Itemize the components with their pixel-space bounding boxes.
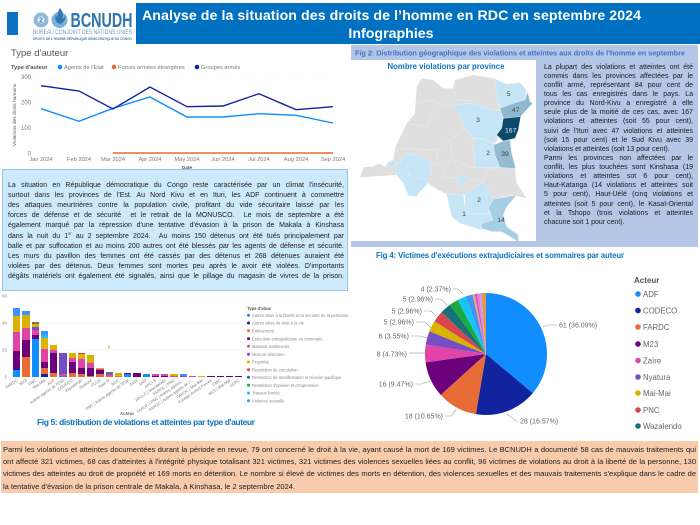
- x axis labels: Raia M: [97, 378, 111, 389]
- x axis: Mar 2024: [101, 157, 125, 163]
- text block: provinces: suivi de l'Ituri avec 47 violations et atteintes: [544, 128, 693, 135]
- province: Nord-Kivu: [497, 117, 521, 141]
- bar legend: Type d'abus: [247, 306, 272, 311]
- bar legend: Restriction de manifestation et réunion pacifique: [252, 375, 342, 380]
- x axis labels: FDLR: [90, 378, 102, 388]
- pie legend: Wazalendo: [643, 422, 682, 431]
- map heading: Nombre violations par province: [388, 62, 505, 71]
- x axis labels: M23: [18, 377, 28, 386]
- map values: 5: [507, 91, 511, 98]
- x axis labels: CMC: [211, 378, 222, 387]
- bar legend: Mort en détention: [252, 352, 285, 357]
- x axis labels: FARDC: [5, 378, 19, 390]
- text panel: summary of violations: victimes des atteintes au droit de propriété et 169 morts en détention. Le nombre si élevé de victimes des morts en détention, des violences sexuelles et des mauvais traitements s'explique dans le cadre de: [3, 469, 696, 478]
- bar legend: Autres abus à la liberté et la sécurité de la personne: [252, 313, 349, 318]
- x axis: [29, 157, 345, 171]
- stacked bars: [13, 308, 242, 377]
- fig 5 caption: Fig 5: distribution de violations et atteintes par type d'auteur: [37, 417, 256, 427]
- x axis labels: ANR: [138, 378, 148, 387]
- x axis labels: FARDC | Autres agents de l'...: [148, 378, 194, 412]
- x axis labels: UDPC: [228, 378, 241, 388]
- line chart: type d'auteur: [11, 48, 345, 171]
- text block: provinces: conflit armé, représentant 84 pour cent de: [544, 82, 693, 89]
- chart legend: Groupes armés: [201, 65, 240, 71]
- x axis: Jun 2024: [211, 157, 235, 163]
- pie data labels: 61 (36.09%): [559, 322, 597, 330]
- bar legend: Autres abus du droit à la vie: [252, 321, 305, 326]
- map values: [462, 91, 520, 224]
- province: Kwilu and Kwango: [396, 153, 431, 197]
- series: agents de l'Etat: [41, 97, 333, 123]
- text panel: situation: surtout dans les provinces de l'Est. Au Nord Kivu et en Ituri, les ADF continuent à commettre: [8, 192, 344, 199]
- y axis labels: 0: [4, 374, 7, 380]
- province: Kongo Central: [386, 160, 397, 167]
- x axis labels: APCLS: [143, 378, 157, 389]
- x axis labels: Acteur: [120, 411, 134, 416]
- title: Analyse de la situation des droits de l’homme en RDC en septembre 2024: [142, 8, 641, 24]
- map values: 2: [486, 150, 490, 157]
- map footer: [351, 241, 536, 247]
- text block: provinces: violations et atteintes sot 6 pour cent),: [544, 173, 693, 180]
- text block: provinces: La plupart des violations et atteintes ont été: [544, 64, 693, 71]
- x axis: Date: [182, 165, 193, 171]
- province: Sud-Kivu: [493, 140, 516, 168]
- x axis: Aug 2024: [284, 157, 308, 163]
- text panel: situation: [2, 169, 348, 291]
- map values: 1: [462, 211, 466, 218]
- text block: provinces: chacune soit 1 pour cent).: [544, 219, 625, 226]
- province: Haut-Katanga: [482, 195, 518, 242]
- text panel: situation: des attaques meurtrières contre la population civile, profitant du vide sécuritaire laissé par les: [8, 202, 344, 209]
- map values: 167: [505, 128, 517, 134]
- chart legend: Agents de l'Etat: [64, 65, 104, 71]
- x axis: Jan 2024: [29, 157, 53, 163]
- x axis labels: M23 | Mai-Mai: [208, 378, 231, 396]
- text panel: situation: forces de défense et de sécurité et le retrait de la MONUSCO. Le mois de septembre a été: [8, 212, 344, 219]
- y axis labels: [2, 294, 7, 380]
- chart legend: Type d'auteur: [11, 65, 48, 71]
- pie data labels: 8 (4.73%): [377, 352, 407, 358]
- fig 4 caption: Fig 4: Victimes d'exécutions extrajudiciaires et sommaires par auteur: [376, 251, 624, 260]
- text block: provinces: Haut-Katanga (14 violations et atteintes soit: [544, 182, 693, 189]
- x axis labels: Zaïre: [128, 377, 139, 387]
- x axis labels: [5, 377, 241, 416]
- y axis labels: 40: [2, 320, 7, 326]
- province: Haut-Uélé: [494, 78, 527, 108]
- province: Lualaba: [447, 194, 493, 230]
- header accent block: [7, 12, 18, 35]
- panel: fig 2 geographic distribution: [351, 45, 698, 247]
- text panel: summary of violations: ont affecté 321 victimes, 68 cas d'atteintes à l'intégrité physique totalisant 321 victimes, 321 victimes des violences sexuelles liées au conflit, 96 victimes de violations au droit à la liberté de la personne, 130: [3, 457, 696, 466]
- text block: provinces: Parmi les provinces non affectées par le: [544, 155, 693, 162]
- x axis labels: APCLS | Wazalendo: [134, 377, 167, 403]
- pie data labels: 5 (2.96%): [384, 320, 414, 326]
- pie data labels: 16 (9.47%): [379, 382, 413, 388]
- y axis: 200: [21, 100, 32, 106]
- text block: provinces: violations et atteintes (soit 13 pour cent).: [544, 146, 670, 153]
- text block: provinces: et la Tshopo (trois violations et atteintes: [544, 210, 693, 217]
- pie legend: M23: [643, 340, 658, 349]
- pie data labels: [377, 286, 597, 426]
- logo tagline: DROITS DE L'HOMME RÉPUBLIQUE DÉMOCRATIQUE DU CONGO: [33, 36, 132, 41]
- text block: provinces: tous les cas enregistrés dans le pays. La: [544, 91, 693, 98]
- y axis: Violations des droits humains: [12, 83, 18, 146]
- province: Haut-Lomami: [465, 182, 493, 214]
- pie data labels: 18 (10.65%): [405, 414, 443, 420]
- province: Maniema: [473, 138, 500, 167]
- bar legend: Travaux forcés: [252, 391, 280, 396]
- text block: provinces: [544, 64, 693, 226]
- x axis: Jul 2024: [248, 157, 270, 163]
- y axis: 0: [28, 152, 32, 158]
- icon: human rights flame: [52, 8, 68, 28]
- text block: provinces: province du Nord-Kivu a enregistré à elle: [544, 100, 693, 107]
- country base: [360, 75, 527, 207]
- bar legend: Restriction d'opinion et d'expression: [252, 383, 319, 388]
- bar legend: Exécution extrajudiciaire ou sommaire: [252, 336, 323, 341]
- y axis labels: 20: [2, 348, 7, 352]
- pie data labels: 28 (16.57%): [520, 418, 558, 426]
- text panel: situation: dans la nuit du 1er au 2 septembre 2024. Au moins 150 détenus ont été tués principalement par: [8, 230, 344, 240]
- x axis labels: Mai-Mai: [32, 378, 46, 390]
- title banner: [136, 3, 700, 44]
- text panel: situation: balle et par suffocation et au moins 200 autres ont été blessés par les agents de défense et sécurité.: [8, 243, 344, 250]
- x axis labels: FARDC | PNC | Autres agents...: [136, 378, 185, 414]
- chart legend: Forces armées étrangères: [118, 65, 185, 71]
- pie chart: victims by actor: [376, 276, 682, 431]
- series: groupes armés: [41, 86, 333, 110]
- pie legend: ADF: [643, 290, 659, 299]
- fig 2 caption: Fig 2: Distribution géographique des violations et atteintes aux droits de l'homme en septembre: [355, 48, 685, 58]
- map values: 2: [477, 197, 481, 204]
- bar legend: Restriction de circulation: [252, 367, 298, 372]
- bar legend: Violence sexuelle: [252, 398, 285, 403]
- pie data labels: 6 (3.55%): [379, 334, 409, 340]
- y axis labels: 60: [2, 294, 7, 298]
- text panel: summary of violations: la tentative d'évasion de la prison centrale de Makala, à Kinshasa, le 2 septembre 2024.: [3, 482, 295, 491]
- pie legend: Nyatura: [643, 373, 671, 382]
- bar chart: violations by actor and abuse type: [2, 294, 349, 416]
- x axis: May 2024: [175, 157, 199, 163]
- x axis labels: Wazalendo: [64, 377, 84, 393]
- text panel: situation: La situation en République démocratique du Congo reste caractérisée par un climat l'insécurité,: [8, 182, 344, 188]
- subtitle: Infographies: [348, 26, 434, 42]
- pie legend: Zaïre: [643, 356, 661, 366]
- logo subtitle: BUREAU CONJOINT DES NATIONS UNIES: [33, 30, 132, 36]
- text panel: summary of violations: Parmi les violations et atteintes documentées durant la période en revue, 79 ont concerné le droit à la vie, ayant causé la mort de 169 victimes. Le BCNUDH a documenté 58 cas de mauvais traitements qui: [3, 444, 696, 454]
- text block: provinces: seule plus de la moitié de ces cas, avec 167: [544, 109, 693, 116]
- x axis labels: Autres agents de l'Etat: [29, 377, 65, 405]
- bar legend: Enlèvement: [252, 328, 275, 333]
- chart title: Type d'auteur: [11, 48, 68, 59]
- pie slices: [456, 324, 516, 384]
- text panel: situation: dégâts matériels ont également été signalés, ainsi que le pillage du magasin de vivres de la prison.: [8, 273, 344, 280]
- text panel: situation: violées par des détenus. Deux femmes sont mortes peu après le avoir été violées. D'importants: [8, 263, 344, 270]
- text panel: summary of violations: [1, 441, 698, 493]
- pie legend: PNC: [643, 406, 660, 415]
- series: forces armées étrangères: [113, 152, 333, 154]
- map values: 14: [497, 217, 505, 224]
- bar legend: Mauvais traitements: [252, 344, 289, 349]
- province: Tshopo: [452, 103, 503, 143]
- y axis: 300: [21, 75, 32, 81]
- x axis labels: Nyatura: [78, 377, 93, 390]
- province: Kasaï-Oriental: [457, 175, 467, 185]
- pie data labels: 5 (2.96%): [392, 308, 422, 316]
- x axis labels: FARDC | Mai-Mai: [175, 378, 204, 400]
- logo: BCNUDH: [33, 8, 132, 41]
- text block: provinces: conflit, les plus touchées sont Kinshasa (19: [544, 164, 693, 171]
- pie legend: Mai-Mai: [643, 389, 671, 398]
- x axis labels: FARDC | PNC: [152, 378, 176, 396]
- pie data labels: 5 (2.96%): [403, 296, 433, 304]
- map values: 39: [501, 151, 509, 158]
- x axis labels: PNC: [27, 378, 37, 387]
- province: Ituri: [500, 92, 533, 118]
- x axis labels: Foreign Armed Forces: [177, 378, 213, 405]
- text block: provinces: (soit 15 pour cent) et le Sud Kivu avec 39: [544, 137, 693, 144]
- icon: UN emblem: 2: [39, 18, 43, 24]
- text block: provinces: atteintes (soit 5 pour cent), le Kasaï-Oriental: [544, 201, 693, 208]
- x axis: Apr 2024: [138, 157, 162, 163]
- chart legend: [11, 65, 240, 71]
- small gold tick: [108, 345, 110, 349]
- pie data labels: 4 (2.37%): [421, 286, 451, 294]
- y axis: 100: [21, 126, 32, 132]
- x axis labels: NDC: [110, 378, 120, 387]
- pie legend: Acteur: [634, 276, 659, 285]
- x axis labels: ADF: [46, 377, 56, 386]
- x axis: Sep 2024: [321, 157, 345, 163]
- bar legend: Propriété: [252, 360, 270, 365]
- bar legend: [247, 306, 349, 403]
- y axis: [12, 75, 32, 158]
- x axis labels: PNC | Autres agents de l'Etat: [84, 377, 130, 411]
- map background: [351, 60, 536, 241]
- text panel: situation: également marqué par la répression d'une tentative d'évasion à la prison de Makala à Kinshasa: [8, 222, 344, 229]
- pie legend: [634, 276, 682, 431]
- text block: provinces: violations et atteintes (soit 55 pour cent),: [544, 118, 693, 125]
- logo name: BCNUDH: [70, 10, 132, 32]
- text block: provinces: 5 pour cent), Haut-Uélé (cinq violations et: [544, 191, 693, 198]
- pie legend: CODECO: [643, 306, 677, 316]
- pie legend: FARDC: [643, 323, 670, 332]
- map values: 47: [512, 107, 520, 114]
- x axis: Feb 2024: [67, 157, 91, 163]
- text block: provinces: commis dans les provinces affectées par le: [544, 73, 693, 80]
- pie leader lines: [409, 289, 557, 421]
- x axis labels: CODECO: [56, 378, 74, 392]
- map values: 3: [476, 117, 480, 124]
- map: violations by province: [360, 75, 533, 242]
- text panel: situation: Les murs du pavillon des femmes ont été cassés par des détenus et 268 détenues auraient été: [8, 253, 344, 260]
